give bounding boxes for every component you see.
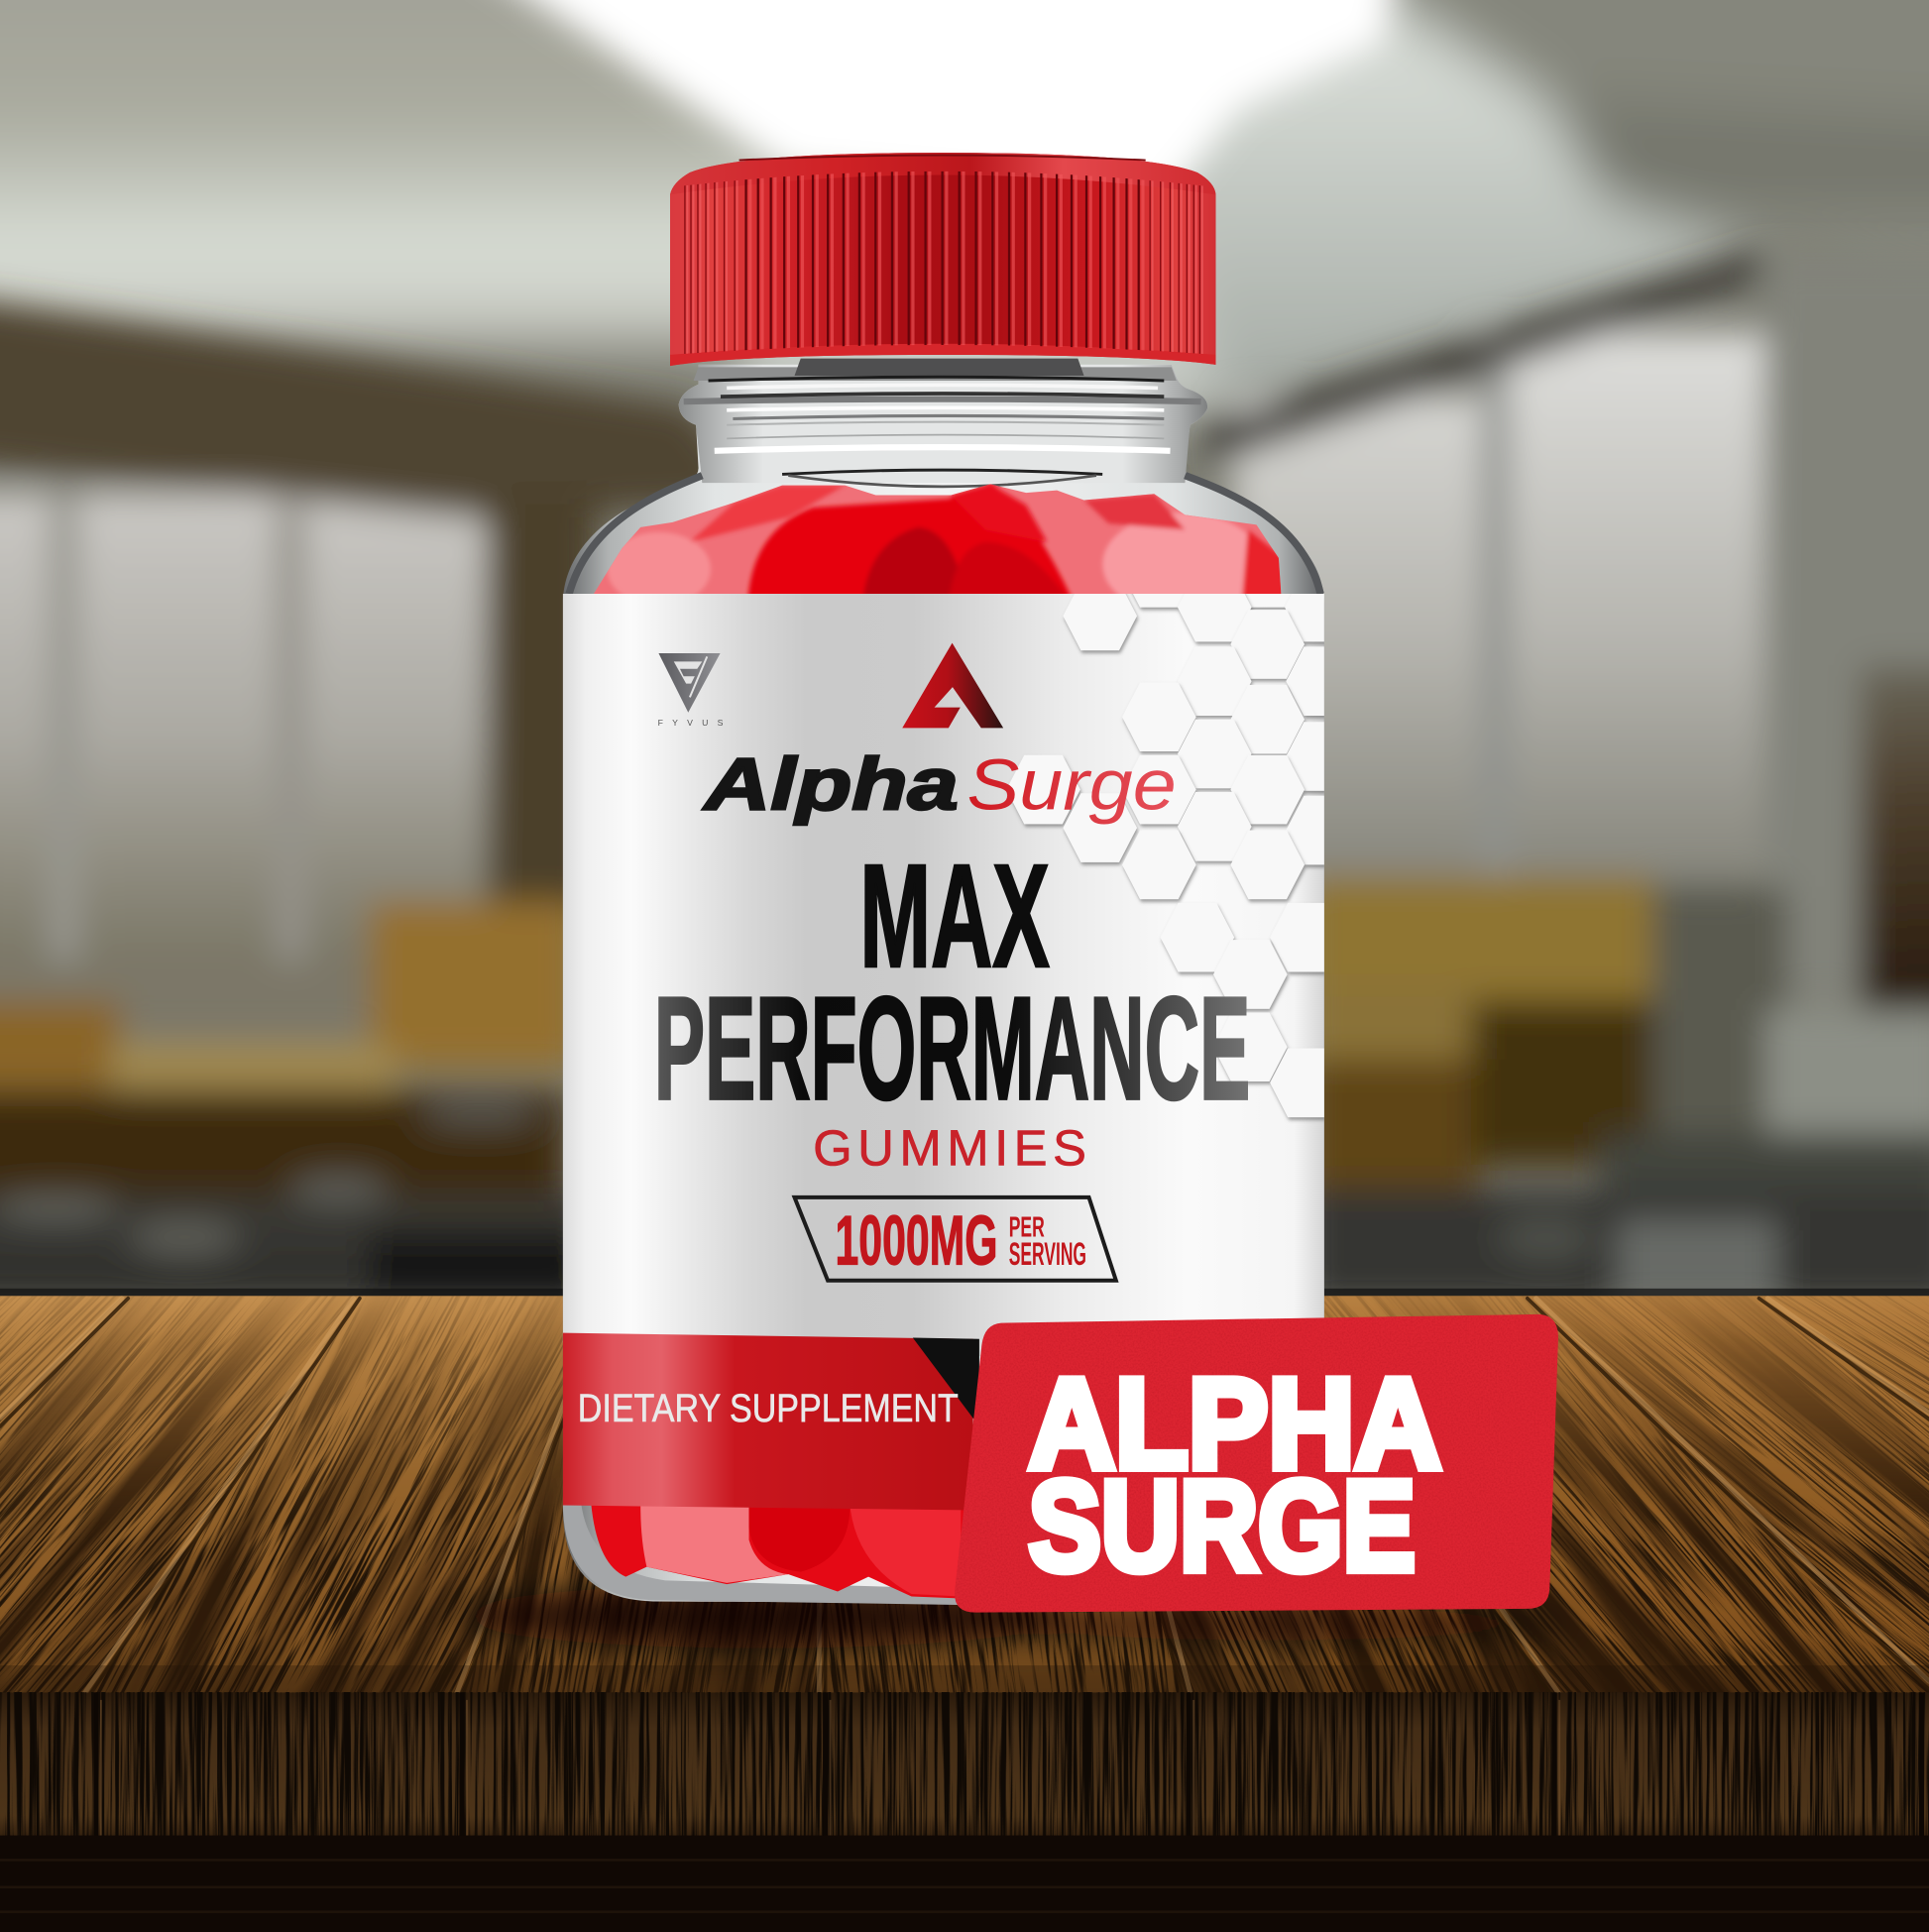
FYVUS brand mark: FYVUS [658, 718, 724, 728]
gummies bottom [591, 1506, 973, 1599]
tag text: SURGE [1029, 1455, 1416, 1598]
wooden table [0, 1296, 1929, 1932]
table front face [0, 1692, 1929, 1838]
tag text [1029, 1353, 1441, 1598]
blurred room background [0, 0, 1929, 1306]
hexagon pattern [1006, 594, 1324, 1122]
gummies subtitle: GUMMIES [813, 1120, 1086, 1177]
glass jar [563, 359, 1324, 1605]
product title: PERFORMANCE [654, 966, 1250, 1130]
jar shadow on table [456, 1584, 1577, 1648]
product label [563, 538, 1360, 1511]
table top planks [0, 1296, 1929, 1696]
Alpha logo mark [902, 643, 1003, 728]
FYVUS brand mark [658, 653, 724, 728]
product bottle [563, 148, 1360, 1605]
tag text: ALPHA [1029, 1353, 1441, 1496]
dosage badge: PER [1009, 1212, 1045, 1244]
red supplement band: DIETARY SUPPLEMENT [578, 1387, 959, 1430]
dosage badge: SERVING [1009, 1236, 1086, 1272]
red supplement band [563, 1333, 979, 1511]
brand name: Alpha [702, 742, 959, 825]
product title [654, 835, 1250, 1130]
product title: MAX [859, 835, 1050, 998]
gummies top [594, 484, 1281, 594]
table underside [0, 1836, 1929, 1932]
plank seams [0, 1299, 1929, 1696]
brand name: Surge [966, 745, 1177, 825]
bottom glass rim [563, 1506, 973, 1605]
near edge shading [0, 1665, 1929, 1696]
dosage badge: 1000MG [836, 1202, 998, 1281]
brand name [702, 742, 1177, 825]
bottle cap [670, 148, 1216, 370]
red brand tag [955, 1314, 1558, 1613]
